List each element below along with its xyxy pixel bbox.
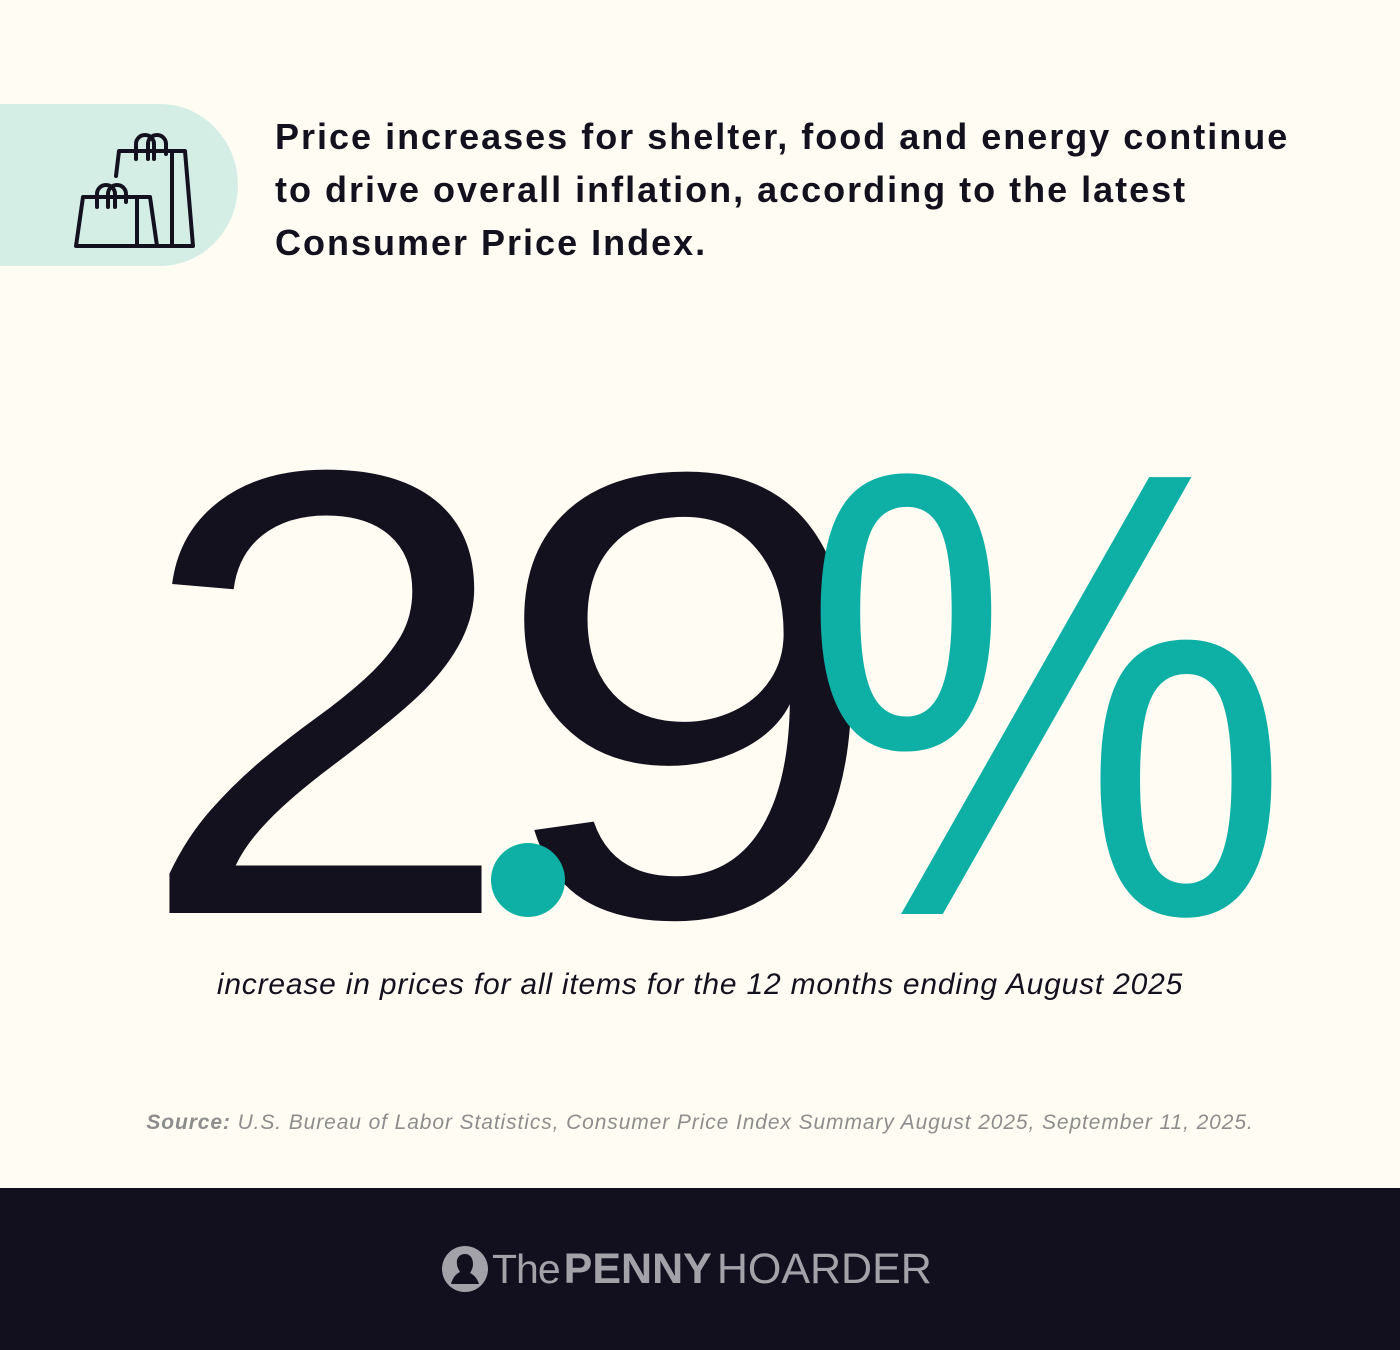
- headline: [275, 116, 1289, 263]
- big number 2.9%: [135, 400, 1291, 960]
- icon badge: shopping bags: [0, 104, 238, 266]
- headline: Consumer Price Index.: [275, 222, 707, 263]
- source: Source: U.S. Bureau of Labor Statistics, Consumer Price Index Summary August 2025, September 11, 2025.: [146, 1111, 1254, 1134]
- logo: [442, 1244, 932, 1292]
- logo: The: [492, 1246, 560, 1292]
- headline: Price increases for shelter, food and energy continue: [275, 116, 1289, 157]
- headline: to drive overall inflation, according to the latest: [275, 169, 1187, 210]
- logo: PENNY: [564, 1244, 712, 1292]
- logo: HOARDER: [717, 1244, 932, 1292]
- caption: increase in prices for all items for the 12 months ending August 2025: [217, 968, 1183, 1001]
- footer: [0, 1188, 1400, 1350]
